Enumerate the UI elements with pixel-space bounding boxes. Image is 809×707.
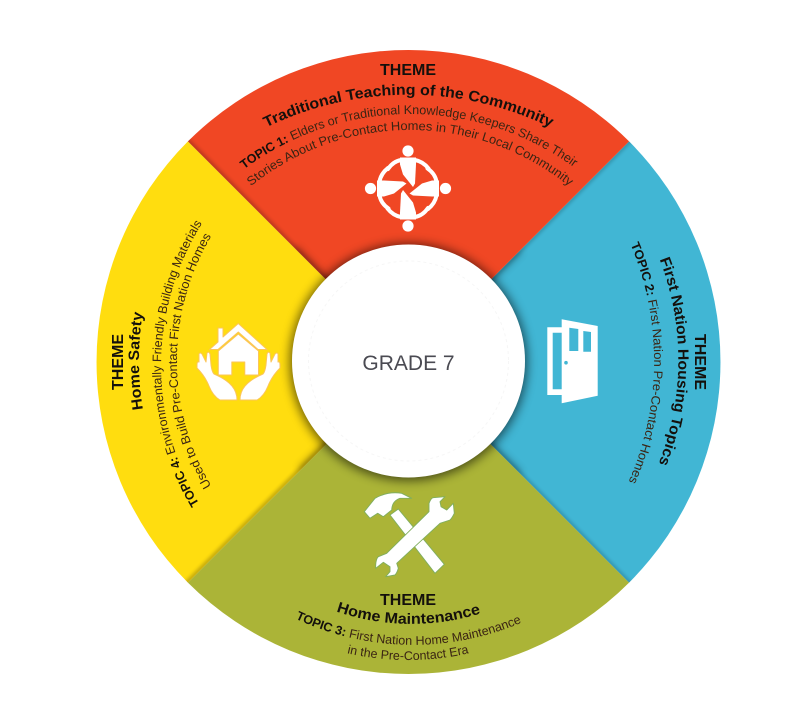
icon: house in hands (197, 324, 280, 400)
text: topic 2: TOPIC 2: First Nation Pre-Contact Homes (629, 241, 663, 484)
heading: First Nation Housing Topics: First Nation Housing Topics (660, 256, 689, 465)
heading: THEME: THEME (691, 334, 708, 390)
icon: hammer and wrench (364, 493, 454, 577)
text: topic 1 line 2: Stories About Pre-Contact Homes in Their Local Community (247, 122, 574, 186)
panel: Home Safety (yellow wedge) (96, 141, 326, 583)
text: topic 1 line 1: TOPIC 1: Elders or Traditional Knowledge Keepers Share Their (239, 105, 578, 168)
text: topic 3 line 1: TOPIC 3: First Nation Home Maintenance (298, 610, 520, 645)
icon: open door (547, 319, 598, 403)
heading: Home Maintenance: Home Maintenance (337, 602, 480, 624)
label: GRADE 7: GRADE 7 (362, 352, 455, 375)
heading: THEME: THEME (110, 334, 127, 390)
panel: Traditional Teaching of the Community (red wedge) (188, 50, 629, 280)
icon: four people in a circle (365, 145, 451, 232)
panel: Home Maintenance (green wedge) (188, 444, 629, 674)
heading: THEME: THEME (380, 592, 436, 609)
text: topic 4 line 2: Used to Build Pre-Contact First Nation Homes (168, 234, 210, 490)
heading: Traditional Teaching of the Community: Traditional Teaching of the Community (262, 84, 554, 128)
panel: First Nation Housing Topics (blue wedge) (490, 141, 720, 583)
text: topic 3 line 2: in the Pre-Contact Era (348, 644, 469, 660)
center circle shadow (290, 243, 528, 481)
center circle (292, 244, 525, 478)
heading: THEME: THEME (380, 62, 436, 79)
heading: Home Safety: Home Safety (128, 312, 145, 410)
text: topic 4 line 1: TOPIC 4: Environmentally Friendly Building Materials (152, 220, 202, 508)
